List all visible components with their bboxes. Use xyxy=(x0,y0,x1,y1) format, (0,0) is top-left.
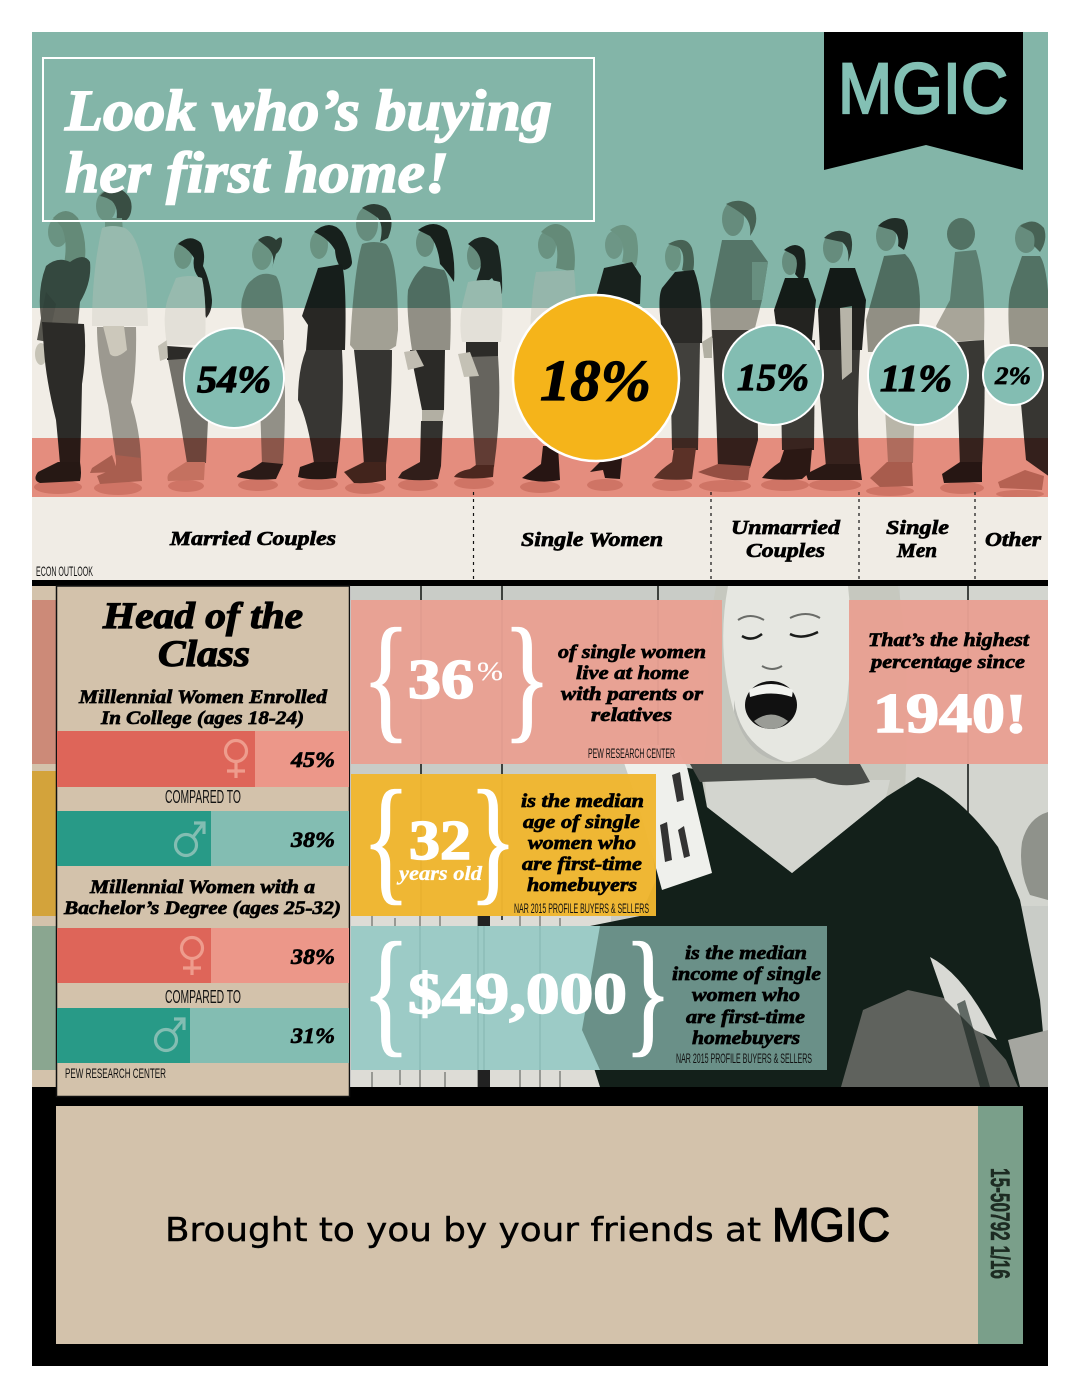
category labels xyxy=(169,517,1041,562)
circle: married couples 54%: 54% xyxy=(197,359,271,401)
callout: median income $49,000: $49,000 xyxy=(408,961,627,1026)
category labels: Married Couples xyxy=(169,528,336,550)
P16 bald man xyxy=(936,218,985,483)
callout: median age 32: age of single xyxy=(523,812,641,833)
bar: women degree 38%: 38% xyxy=(290,944,335,969)
callout: median age 32: } xyxy=(469,763,517,917)
P13 dark cardigan xyxy=(762,245,816,480)
P7 shorts and boots xyxy=(398,224,454,480)
callout: median age 32 xyxy=(351,763,656,917)
foot shadows xyxy=(34,477,1044,498)
P1 blonde in hoodie xyxy=(35,211,90,483)
P2 man white shirt xyxy=(90,189,148,484)
callout: 36% live at home: with parents or xyxy=(561,684,704,705)
callout: median income $49,000: is the median xyxy=(685,943,807,964)
P15 man in polo xyxy=(866,218,920,487)
callout: median income $49,000: } xyxy=(624,915,672,1069)
circle: single men 11%: 11% xyxy=(880,358,952,400)
subheading: enrolled in college xyxy=(78,687,328,729)
bar: men degree 31% xyxy=(57,1008,349,1063)
subheading: bachelor's degree: Millennial Women with a xyxy=(89,877,316,898)
callout: median age 32: years old xyxy=(397,863,483,885)
callout: median age 32: NAR 2015 PROFILE BUYERS & SELLERS xyxy=(514,900,649,916)
compared to: COMPARED TO xyxy=(165,787,241,807)
P5 dark top xyxy=(298,225,352,479)
footer panel xyxy=(56,1106,1023,1344)
P17 man at end xyxy=(998,221,1050,490)
circle: single men 11% xyxy=(868,325,968,425)
subheading: bachelor's degree: Bachelor’s Degree (ages 25-32) xyxy=(63,898,341,919)
circle: unmarried couples 15%: 15% xyxy=(737,357,809,399)
callout: 36% live at home xyxy=(351,600,722,764)
callout: median income $49,000: NAR 2015 PROFILE BUYERS & SELLERS xyxy=(676,1050,812,1066)
bar: men enrolled 38%: 38% xyxy=(290,827,335,852)
subheading: enrolled in college: Millennial Women Enrolled xyxy=(78,687,328,708)
sweater xyxy=(582,760,1048,1087)
title box xyxy=(43,58,594,221)
callout: median age 32: 32 xyxy=(409,810,471,872)
mouth xyxy=(745,681,797,729)
bar: women degree 38% xyxy=(57,928,349,983)
circle: other 2%: 2% xyxy=(994,363,1031,390)
callout: 36% live at home: 36 xyxy=(408,649,474,711)
footer sign-off: Brought to you by your friends at xyxy=(165,1210,761,1249)
callout: median income $49,000: { xyxy=(362,915,410,1069)
spatula xyxy=(624,764,712,890)
footer logo: MGIC xyxy=(772,1198,890,1251)
logo ribbon: MGIC xyxy=(824,32,1023,170)
bar: women enrolled 45% xyxy=(57,731,349,787)
callout: 36% live at home: { xyxy=(362,601,410,755)
P4 bun xyxy=(237,236,285,480)
heading: Class xyxy=(158,634,250,675)
P6 tall man xyxy=(344,204,398,483)
panel: hero line of buyers xyxy=(32,32,1050,580)
subheading: bachelor's degree xyxy=(63,877,341,919)
bar: men enrolled 38% xyxy=(57,811,349,866)
category labels: Couples xyxy=(746,540,825,562)
mottled wood strip xyxy=(372,916,560,1087)
lighter garments xyxy=(92,226,576,345)
callout: median age 32: { xyxy=(362,763,410,917)
jeans xyxy=(841,990,1018,1087)
chest xyxy=(705,780,890,873)
source: econ outlook: ECON OUTLOOK xyxy=(36,563,93,579)
callout: 36% live at home: } xyxy=(503,601,551,755)
face xyxy=(723,586,851,762)
panel: head of the class xyxy=(56,586,350,1096)
hand xyxy=(1021,812,1048,900)
callout: highest since 1940 xyxy=(849,600,1048,764)
P10 blonde dark top xyxy=(590,225,641,479)
heading xyxy=(102,596,303,675)
callout: median age 32: are first-time xyxy=(522,854,643,875)
circle: unmarried couples 15% xyxy=(723,325,823,425)
callout: median income $49,000: women who xyxy=(692,985,800,1006)
black divider and lower background xyxy=(32,580,1048,586)
callout: 36% live at home: PEW RESEARCH CENTER xyxy=(588,745,675,761)
circle: other 2% xyxy=(983,345,1043,405)
P12 tall man in vest xyxy=(698,201,768,480)
hair xyxy=(891,586,906,790)
P8 curly hair xyxy=(454,237,502,478)
heading: Head of the xyxy=(102,596,303,637)
eyes and nose xyxy=(742,632,818,639)
callout: 36% live at home: of single women xyxy=(558,642,706,663)
bar: men degree 31%: 31% xyxy=(290,1023,335,1048)
callout: highest since 1940: That’s the highest xyxy=(868,630,1030,651)
compared to: COMPARED TO xyxy=(165,987,241,1007)
callout: median age 32: homebuyers xyxy=(527,875,637,896)
logo ribbon: MGIC: MGIC xyxy=(838,50,1008,129)
category labels: Men xyxy=(896,540,937,562)
callout: median age 32: is the median xyxy=(521,791,644,812)
callout: median income $49,000: homebuyers xyxy=(692,1028,800,1049)
callout: highest since 1940: 1940! xyxy=(873,683,1027,745)
category labels: Single xyxy=(886,517,949,539)
illustration: queue of people in profile xyxy=(34,189,1050,498)
title box: Look who’s buying xyxy=(64,78,552,143)
P9 blonde xyxy=(522,224,576,482)
callout: median income $49,000 xyxy=(351,915,827,1070)
callout: 36% live at home: live at home xyxy=(576,663,690,684)
category labels: Other xyxy=(985,529,1041,551)
P14 man in black tee xyxy=(806,231,866,480)
left colour strip xyxy=(32,586,56,1087)
job code: 15-50792 1/16 xyxy=(985,1168,1015,1279)
circle: single women 18%: 18% xyxy=(540,348,651,413)
P11 dark top xyxy=(654,240,702,480)
callout: median age 32: women who xyxy=(528,833,636,854)
bar: women enrolled 45%: 45% xyxy=(290,747,335,772)
circle: married couples 54% xyxy=(184,328,284,428)
callout: median income $49,000: income of single xyxy=(672,964,822,985)
P3 ponytail xyxy=(158,238,212,481)
callout: 36% live at home: relatives xyxy=(591,705,672,726)
callout: median income $49,000: are first-time xyxy=(686,1007,806,1028)
title box: her first home! xyxy=(65,140,449,205)
callout: highest since 1940: percentage since xyxy=(869,652,1026,673)
category labels: Single Women xyxy=(521,529,663,551)
circle: single women 18% xyxy=(513,295,679,461)
callout: 36% live at home: % xyxy=(477,657,503,686)
dashed category dividers xyxy=(474,492,975,580)
source: pew: PEW RESEARCH CENTER xyxy=(65,1065,166,1081)
photo: laughing woman against wood fence xyxy=(351,586,1048,1087)
subheading: enrolled in college: In College (ages 18-24) xyxy=(100,708,304,729)
category labels: Unmarried xyxy=(731,517,841,539)
